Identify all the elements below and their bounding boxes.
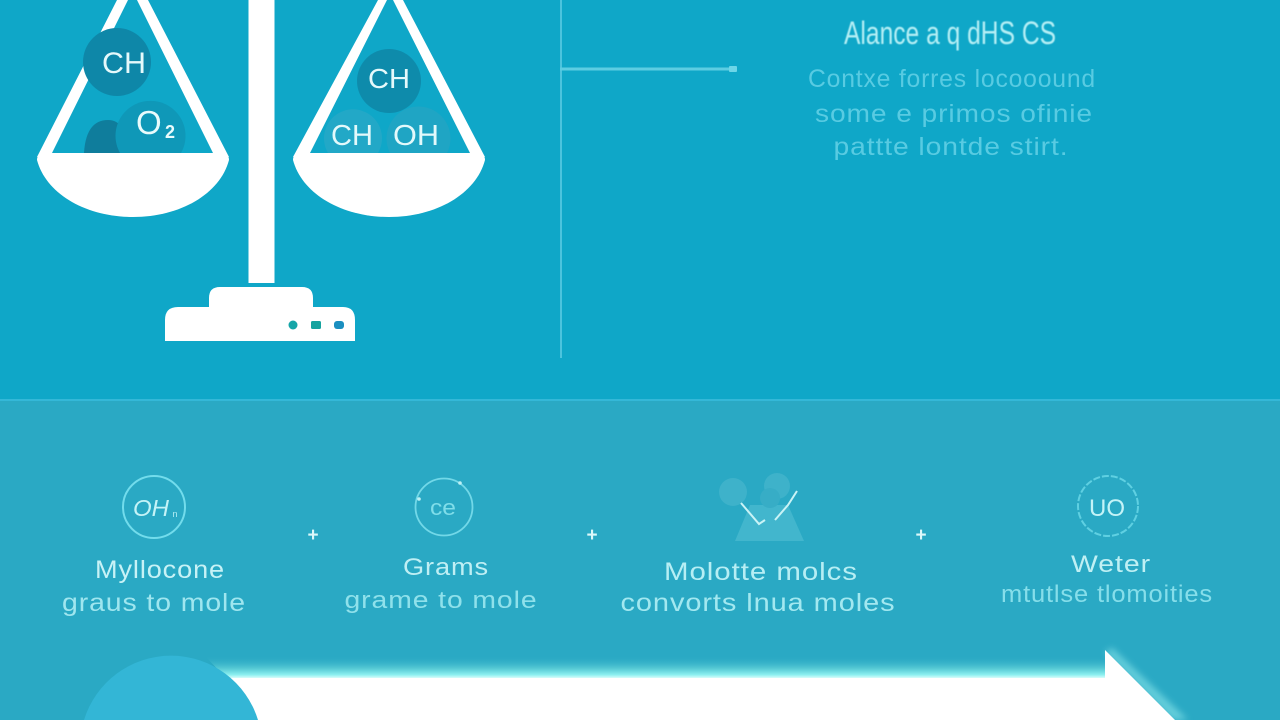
step 3 label: convorts lnua moles [620, 589, 896, 617]
step 4: water [1001, 476, 1213, 608]
left molecule: O2: O [136, 104, 162, 141]
step 4 label: mtutlse tlomoities [1001, 581, 1213, 608]
scale base [165, 287, 355, 341]
right molecule: lower left CH [324, 109, 382, 153]
step 1 label: graus to mole [62, 589, 246, 617]
callout body: some e primos ofinie [815, 100, 1093, 128]
right molecule: top CH: CH [368, 63, 410, 94]
icon: dotted circle [416, 478, 472, 536]
icon: flask with check line [719, 473, 804, 541]
callout body [808, 65, 1096, 161]
callout heading: Alance a q dHS CS [844, 15, 1056, 51]
start circle [84, 656, 258, 720]
icon: circled molecule: n [172, 509, 178, 519]
step 4 label: Weter [1071, 551, 1151, 578]
step 1: molecule [62, 476, 246, 617]
plus sign 3: + [915, 525, 927, 546]
step 3 label [620, 558, 896, 617]
icon: dotted circle: ce [430, 495, 456, 520]
right molecule: lower right OH: OH [393, 120, 439, 152]
right pan [293, 0, 485, 217]
left molecule: O2 [116, 101, 185, 153]
icon: circled molecule: OH [133, 495, 169, 521]
left molecule: hidden sphere [84, 120, 127, 153]
right pan strings [293, 0, 485, 157]
left molecule: O2: 2 [165, 122, 175, 142]
right molecule: lower right OH [386, 106, 451, 153]
balance scale illustration [37, 0, 485, 341]
right pan bowl [293, 153, 485, 217]
left pan [37, 0, 229, 217]
arrow body [222, 650, 1175, 720]
step 2 label: Grams [403, 554, 489, 581]
callout body: Contxe forres locooound [808, 65, 1096, 93]
icon: dashed circle: UO [1089, 495, 1125, 522]
plus sign 1: + [307, 525, 319, 546]
step 2 label: grame to mole [344, 587, 538, 614]
step 2: grams [344, 478, 538, 614]
icon: circled molecule [123, 476, 185, 538]
left molecule: CH [83, 28, 151, 96]
left pan bowl [37, 153, 229, 217]
arrow glow [205, 656, 1105, 678]
panel: upper background [0, 0, 1280, 400]
step 2 label [344, 554, 538, 614]
base indicator dots [288, 320, 344, 330]
callout body: pattte lontde stirt. [834, 133, 1068, 161]
step 1 label: Myllocone [95, 556, 225, 584]
step 1 label [62, 556, 246, 617]
step 3 label: Molotte molcs [664, 558, 858, 586]
callout text block [808, 15, 1096, 161]
icon: dashed circle [1078, 476, 1138, 536]
step 3: molecule moles [620, 473, 896, 617]
right molecule: lower left CH: CH [331, 120, 373, 152]
bottom progress arrow [84, 648, 1188, 720]
step 4 label [1001, 551, 1213, 608]
panel: lower background [0, 400, 1280, 720]
left molecule: CH: CH [102, 47, 146, 80]
scale post [248, 0, 274, 283]
plus sign 2: + [586, 525, 598, 546]
right molecule: top CH [357, 49, 421, 113]
left pan strings [37, 0, 229, 157]
callout leader line [560, 0, 737, 358]
